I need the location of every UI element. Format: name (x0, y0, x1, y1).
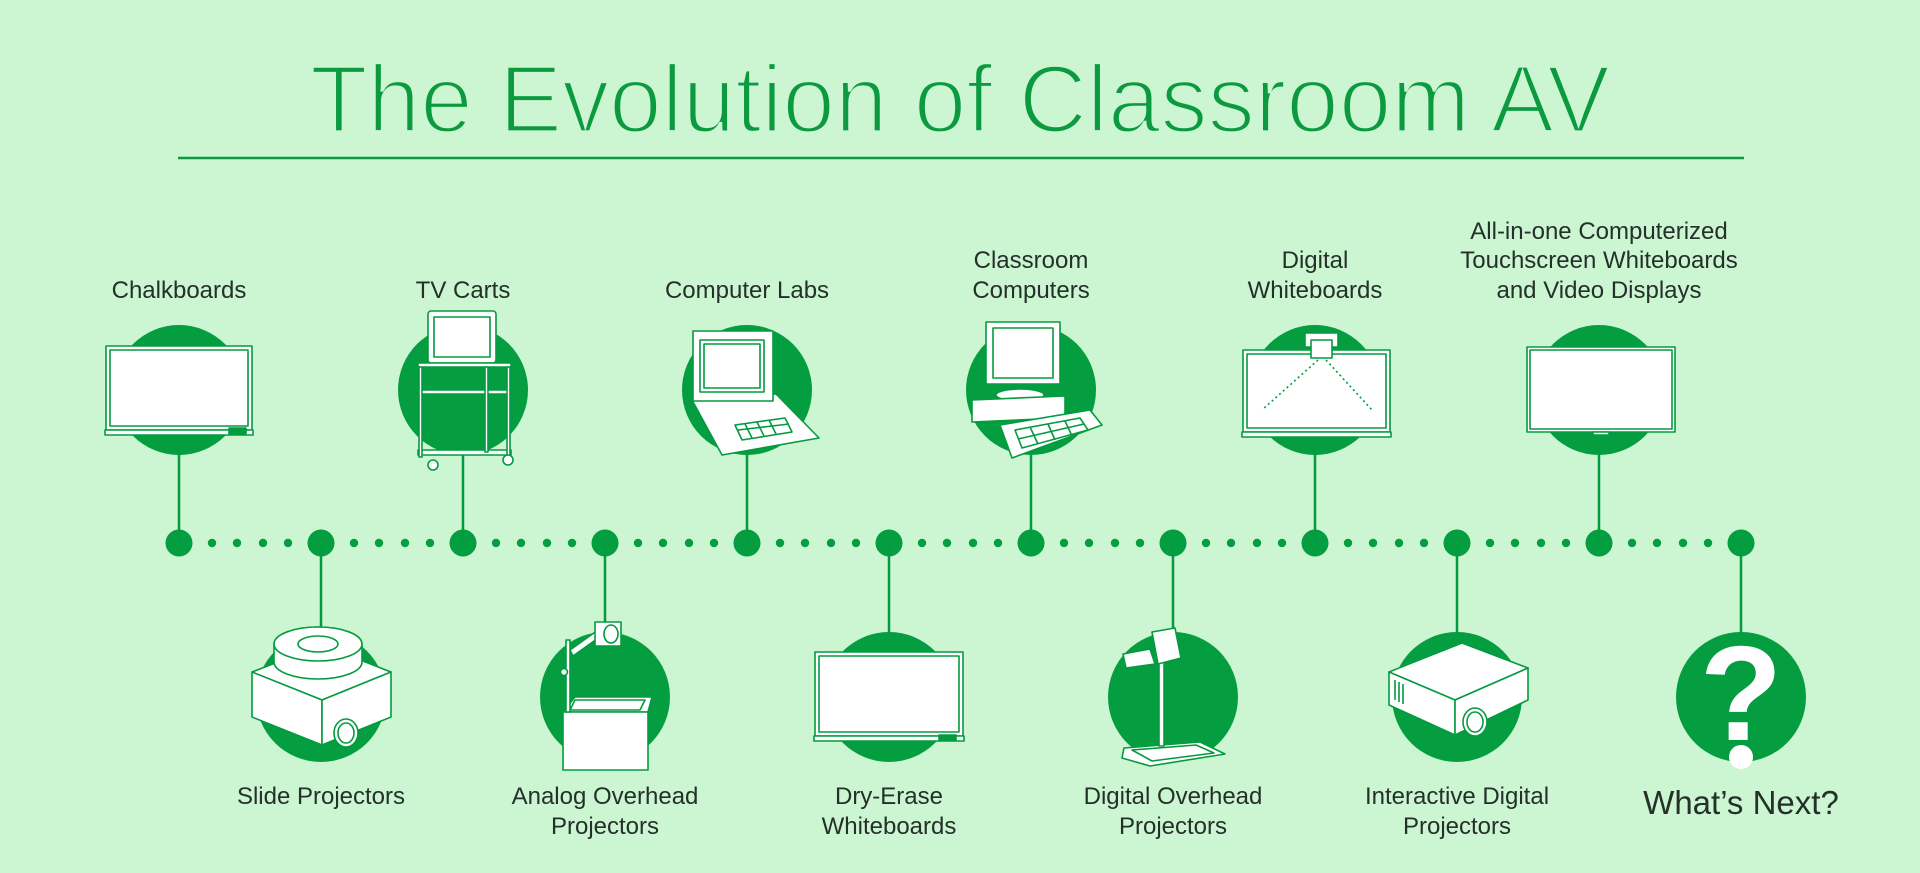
icon: digital overhead projector (1122, 628, 1225, 766)
circles (114, 325, 1806, 762)
bottom labels: Projectors (551, 813, 659, 840)
top labels: and Video Displays (1496, 277, 1702, 304)
top labels: TV Carts (416, 277, 510, 304)
bottom labels: Analog Overhead (512, 783, 698, 810)
top labels: Classroom (974, 247, 1088, 274)
bottom labels: Digital Overhead (1084, 783, 1262, 810)
icon: question mark: ? (1700, 618, 1782, 769)
bottom labels (237, 783, 1839, 840)
icon: dry-erase whiteboard (814, 652, 964, 741)
icon: tv cart (418, 311, 513, 470)
bottom labels: What’s Next? (1643, 784, 1839, 821)
icon: interactive projector (1389, 643, 1528, 736)
top labels (112, 218, 1738, 304)
icon: chalkboard (105, 346, 253, 435)
icon: digital whiteboard (1242, 333, 1391, 437)
icon: classroom computer (972, 322, 1102, 458)
timeline (166, 530, 1754, 556)
top labels: Computers (972, 277, 1090, 304)
top labels: Digital (1282, 247, 1348, 274)
top labels: Chalkboards (112, 277, 246, 304)
top labels: Touchscreen Whiteboards (1460, 247, 1738, 274)
bottom labels: Whiteboards (822, 813, 956, 840)
connectors (179, 450, 1741, 635)
icon: analog overhead projector (560, 622, 652, 770)
top labels: Computer Labs (665, 277, 829, 304)
icon: computer lab (692, 331, 819, 455)
bottom labels: Projectors (1403, 813, 1511, 840)
icon: slide projector (252, 627, 391, 747)
bottom labels: Dry-Erase (835, 783, 943, 810)
top labels: All-in-one Computerized (1470, 218, 1728, 245)
bottom labels: Interactive Digital (1365, 783, 1549, 810)
title: The Evolution of Classroom AV (310, 46, 1610, 153)
top labels: Whiteboards (1248, 277, 1382, 304)
bottom labels: Projectors (1119, 813, 1227, 840)
bottom labels: Slide Projectors (237, 783, 405, 810)
icon: all-in-one display (1527, 347, 1675, 435)
